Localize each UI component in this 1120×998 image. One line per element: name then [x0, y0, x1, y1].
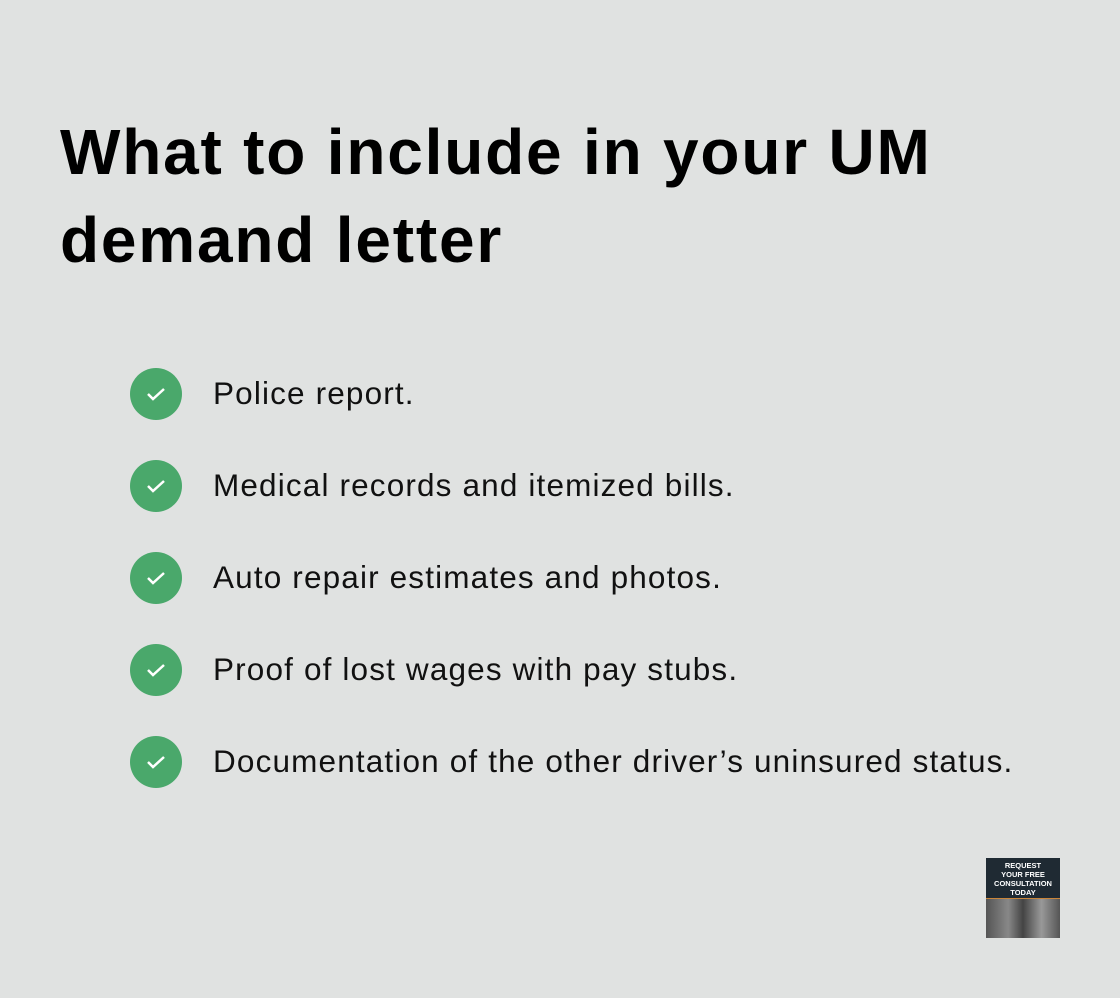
logo badge [986, 858, 1060, 938]
item 1 [130, 368, 415, 420]
item 4 [130, 644, 738, 696]
logo badge: CONSULTATION [994, 879, 1052, 888]
item 3: Auto repair estimates and photos. [213, 559, 722, 595]
item 1: Police report. [213, 375, 415, 411]
item 5 [130, 736, 1013, 788]
item 3 [130, 552, 722, 604]
item 2: Medical records and itemized bills. [213, 467, 735, 503]
title: demand letter [60, 204, 503, 276]
logo badge: YOUR FREE [1001, 870, 1045, 879]
logo badge: TODAY [1010, 888, 1036, 897]
item 4: Proof of lost wages with pay stubs. [213, 651, 738, 687]
checklist [130, 368, 1013, 788]
logo badge: REQUEST [1005, 861, 1041, 870]
title: What to include in your UM [60, 116, 932, 188]
item 2 [130, 460, 735, 512]
title [60, 116, 932, 276]
item 5: Documentation of the other driver’s uninsured status. [213, 743, 1013, 779]
